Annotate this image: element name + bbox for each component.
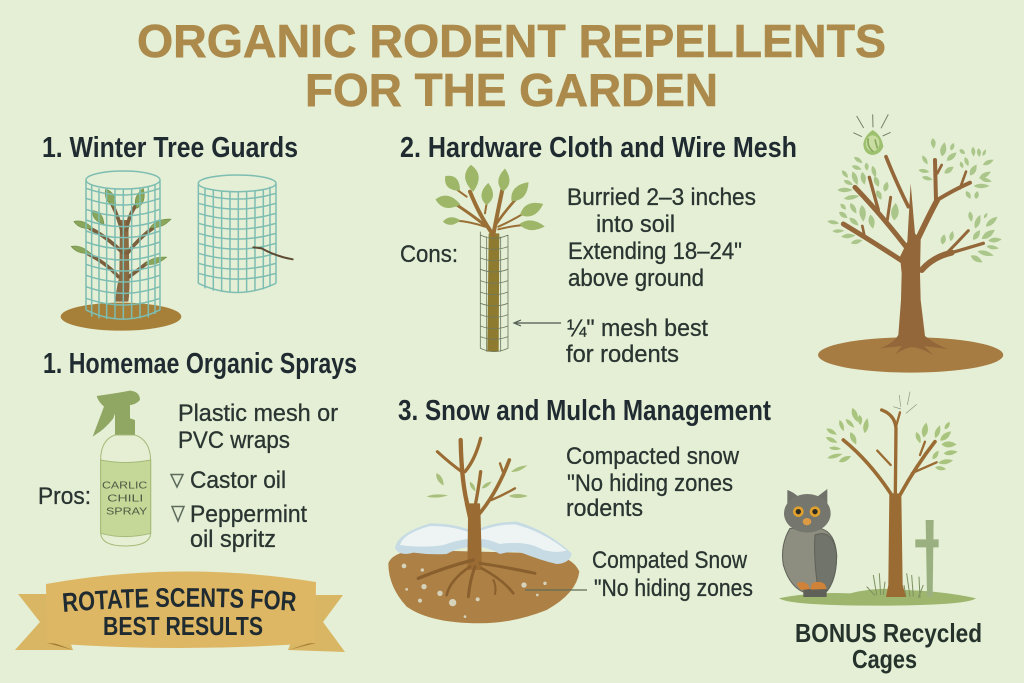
illustration: large tree with bud <box>818 114 1003 373</box>
heading: hardware cloth: 2. Hardware Cloth and Wire Mesh <box>400 132 797 164</box>
text: compated snow <box>592 547 753 602</box>
text: burial and height: above ground <box>568 265 704 292</box>
text: plastic mesh or pvc wraps <box>178 400 338 454</box>
text: burial and height <box>567 184 756 292</box>
banner: rotate scents <box>15 572 345 652</box>
list: sprays <box>171 467 307 553</box>
illustration: tree in snow and soil <box>388 438 579 623</box>
text: compacted snow: Compacted snow <box>566 443 740 470</box>
leader line: soil callout <box>525 589 587 591</box>
text: compated snow: Compated Snow <box>592 547 748 574</box>
post <box>915 520 939 597</box>
title <box>137 15 886 116</box>
title: ORGANIC RODENT REPELLENTS <box>137 15 886 67</box>
icon: spray bottle: CARLIC <box>102 480 148 491</box>
icon: spray bottle <box>93 391 151 546</box>
illustration: empty wire guard <box>198 175 293 292</box>
caption: bonus recycled cages: Cages <box>852 644 917 674</box>
text: mesh size <box>566 315 708 368</box>
title: FOR THE GARDEN <box>305 64 718 116</box>
arrow: mesh pointer <box>514 320 561 326</box>
icon: spray bottle: SPRAY <box>106 506 147 517</box>
ground <box>779 589 976 606</box>
text: plastic mesh or pvc wraps: PVC wraps <box>178 427 290 454</box>
illustration: caged sapling <box>61 171 181 331</box>
list: sprays: Castor oil <box>190 467 286 494</box>
text: plastic mesh or pvc wraps: Plastic mesh or <box>178 400 338 427</box>
banner: rotate scents: ROTATE SCENTS FOR <box>63 588 296 612</box>
heading: winter tree guards: 1. Winter Tree Guards <box>42 132 298 164</box>
icon: spray bottle: CHILI <box>107 494 143 505</box>
list: sprays: oil spritz <box>190 526 276 553</box>
bud icon <box>853 114 891 155</box>
grass <box>867 573 923 598</box>
label: pros: Pros: <box>38 483 91 510</box>
text: burial and height: into soil <box>596 211 675 238</box>
heading: snow and mulch: 3. Snow and Mulch Management <box>398 395 771 427</box>
text: burial and height: Burried 2–3 inches <box>567 184 756 211</box>
owl <box>782 489 837 597</box>
caption: bonus recycled cages <box>795 618 982 674</box>
list: sprays: Peppermint <box>190 501 307 528</box>
text: mesh size: ¼" mesh best <box>567 315 708 342</box>
banner: rotate scents: BEST RESULTS <box>103 611 263 641</box>
text: compacted snow: "No hiding zones <box>567 470 733 497</box>
text: mesh size: for rodents <box>566 341 679 368</box>
text: compacted snow <box>566 443 740 522</box>
label: cons: Cons: <box>400 241 458 268</box>
text: burial and height: Extending 18–24" <box>568 238 742 265</box>
illustration: tree in mesh tube <box>434 164 546 352</box>
text: compacted snow: rodents <box>566 495 643 522</box>
illustration: owl, tree and post <box>779 392 976 606</box>
tree trunk <box>886 493 906 597</box>
text: compated snow: "No hiding zones <box>594 575 753 602</box>
heading: homemade organic sprays: 1. Homemae Organic Sprays <box>43 348 357 380</box>
caption: bonus recycled cages: BONUS Recycled <box>795 618 982 648</box>
